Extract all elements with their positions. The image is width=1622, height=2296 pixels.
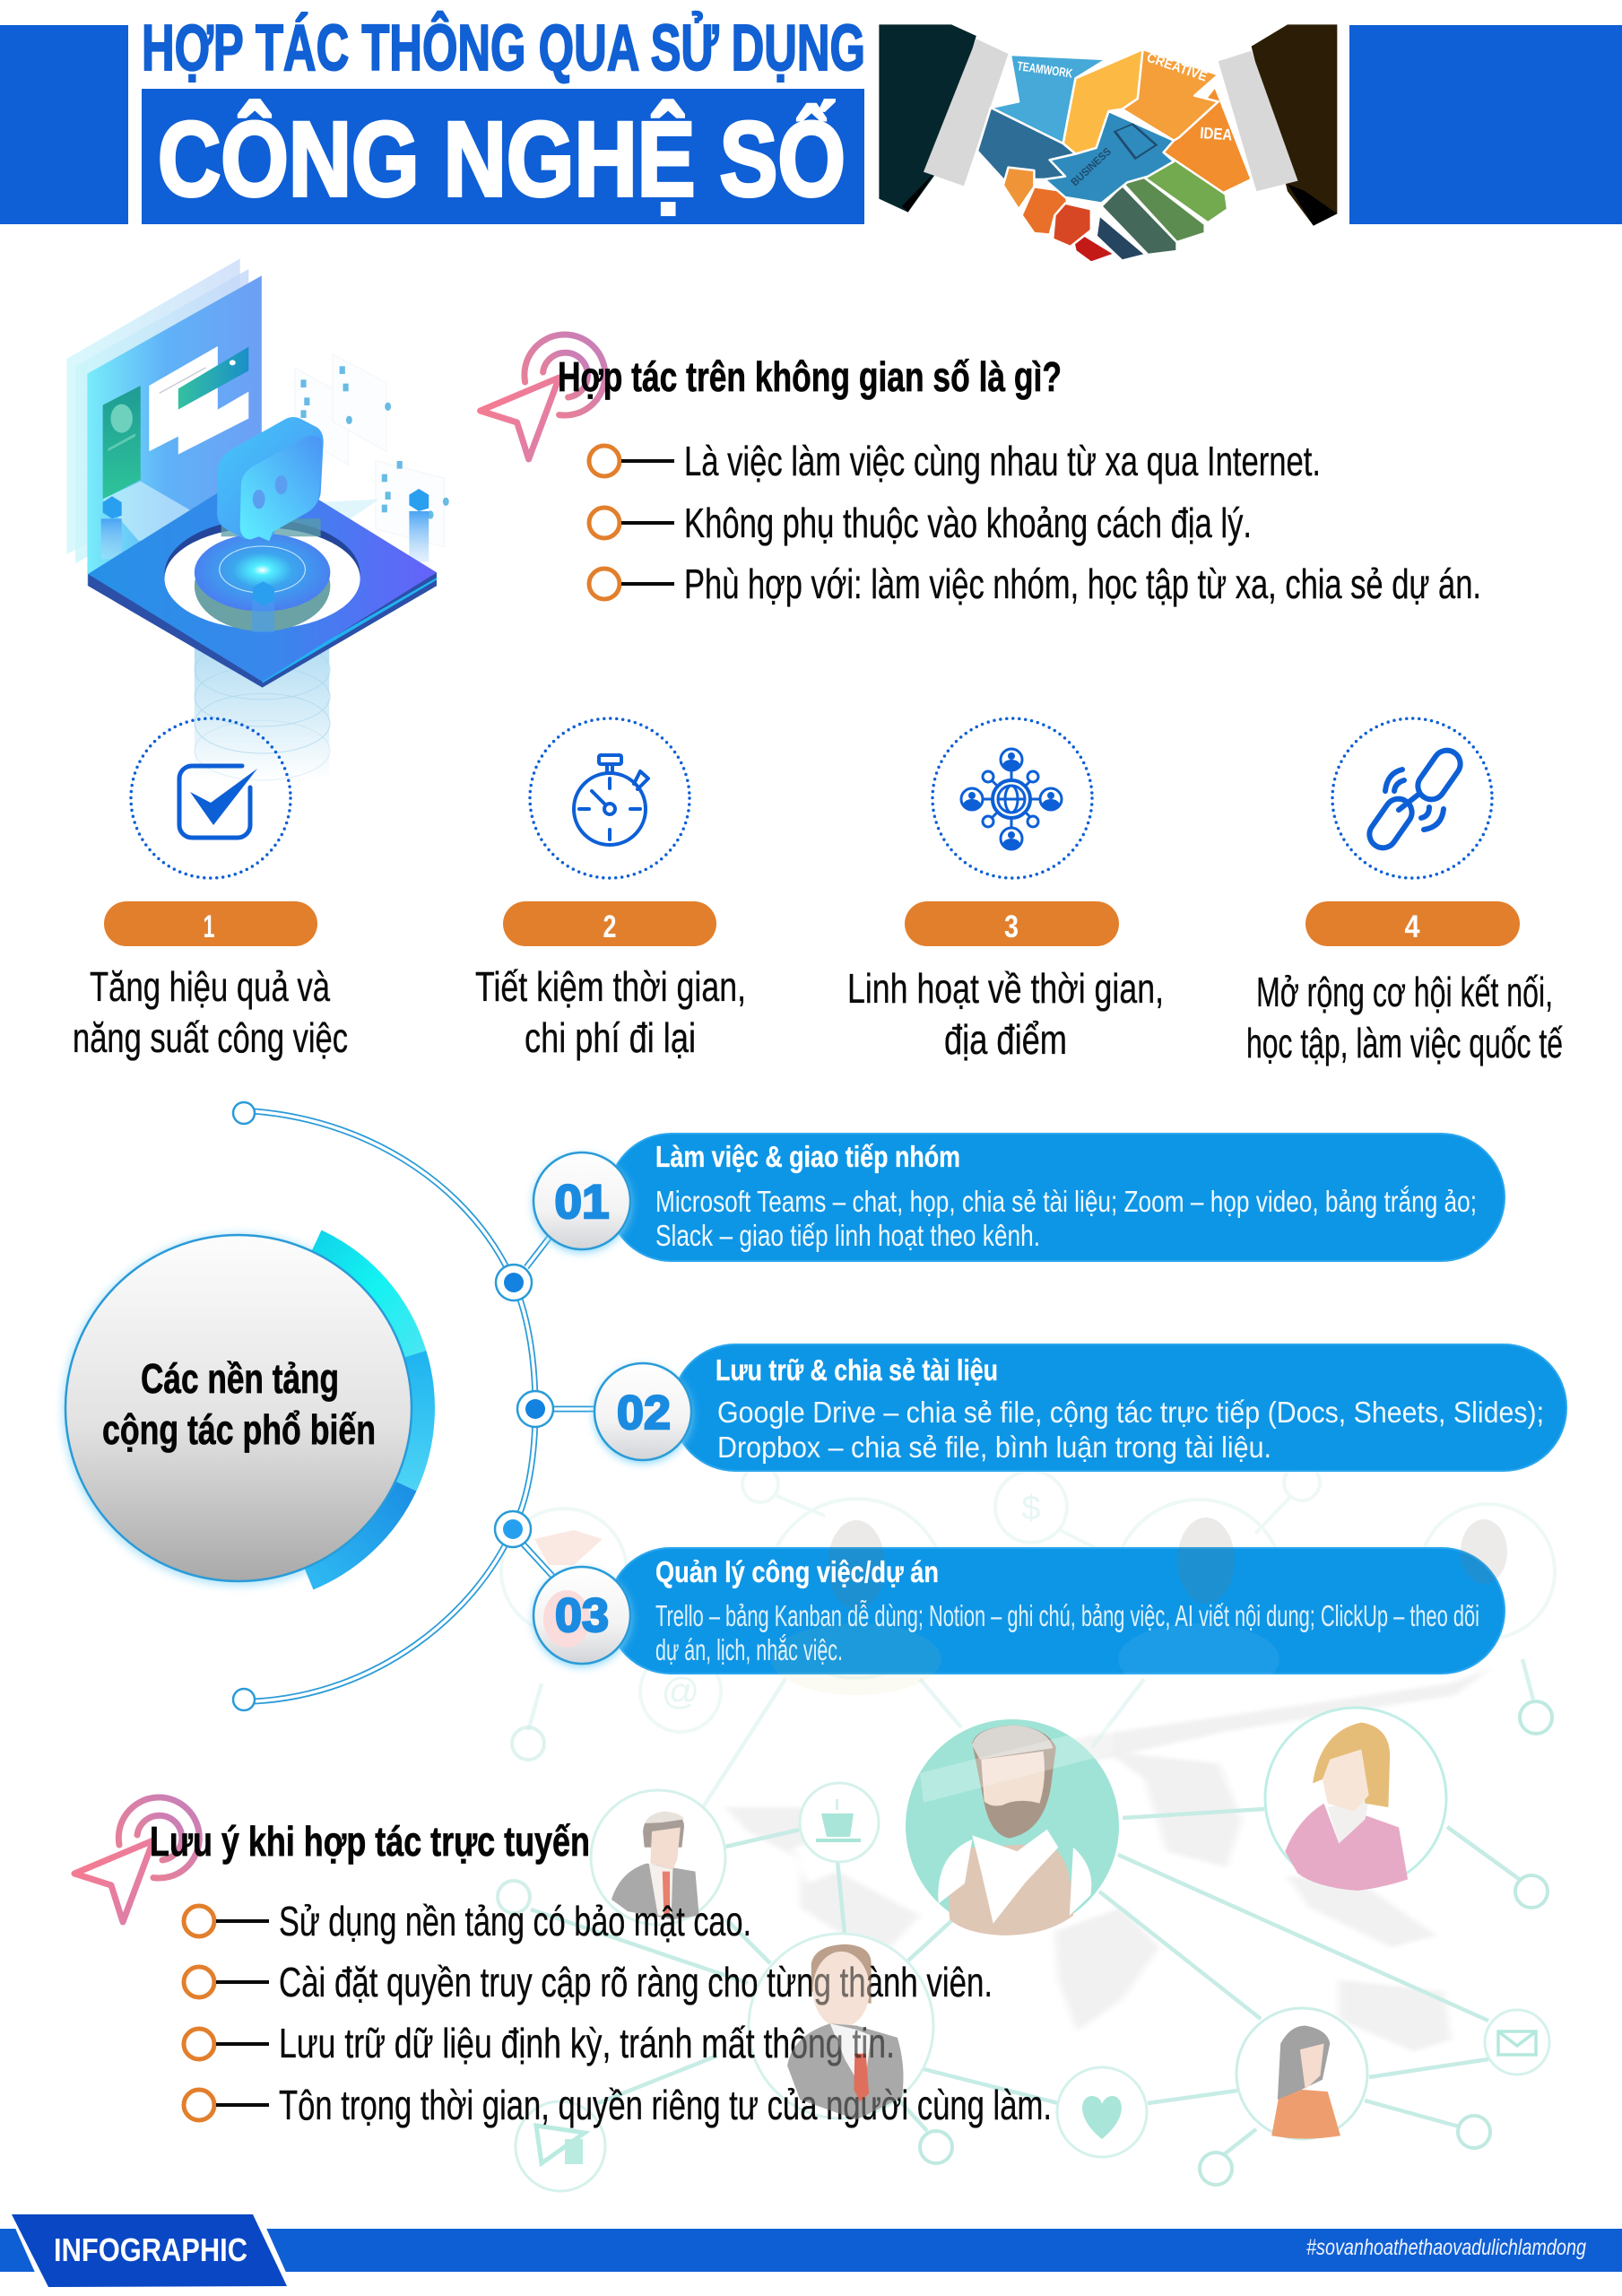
person: woman in pink xyxy=(1265,1708,1446,1891)
handshake puzzle illustration xyxy=(879,24,1337,263)
benefit 2: chi phí đi lại xyxy=(525,1014,696,1061)
label: idea: IDEA xyxy=(1200,124,1233,144)
bullet list xyxy=(589,438,1481,607)
outer arc xyxy=(233,1102,535,1710)
central circle with coloured arcs: cộng tác phổ biến xyxy=(102,1406,376,1453)
section: benefits xyxy=(73,718,1563,1066)
benefit 1: Tăng hiệu quả và xyxy=(90,963,330,1010)
item 01 xyxy=(533,1134,1505,1261)
benefit 2: Tiết kiệm thời gian, xyxy=(475,963,746,1010)
central circle with coloured arcs: Các nền tảng xyxy=(141,1355,339,1402)
connecting lines xyxy=(528,1659,1533,2155)
central circle with coloured arcs xyxy=(63,1234,422,1586)
benefit 4: 4 xyxy=(1404,909,1420,944)
footer tab xyxy=(12,2214,287,2287)
label: business: BUSINESS xyxy=(1068,145,1114,188)
section: what is digital collaboration xyxy=(481,335,1481,607)
footer tab outline xyxy=(6,2208,295,2292)
person: woman in orange xyxy=(1236,2008,1367,2139)
benefit 1: 1 xyxy=(203,909,215,944)
benefit 3: 3 xyxy=(1004,909,1019,944)
badge xyxy=(533,1570,630,1666)
isometric chat platform illustration xyxy=(66,258,449,780)
item 02: Dropbox – chia sẻ file, bình luận trong tài liệu. xyxy=(717,1431,1271,1464)
ghost figures showing through xyxy=(771,1518,1507,1695)
text: Làm việc & giao tiếp nhóm xyxy=(655,1140,960,1173)
benefit 3: địa điểm xyxy=(944,1016,1067,1063)
benefit 2: 2 xyxy=(603,909,617,944)
figure overlay tinting the text xyxy=(787,1944,903,2119)
title line 1: HỢP TÁC THÔNG QUA SỬ DỤNG xyxy=(142,12,865,84)
pill xyxy=(672,1344,1566,1471)
text: Quản lý công việc/dự án xyxy=(655,1555,939,1588)
base xyxy=(88,572,437,688)
item 01: 01 xyxy=(554,1176,610,1229)
timeline nodes xyxy=(495,1265,553,1547)
floor glow xyxy=(103,482,218,541)
icon: coffee cup xyxy=(800,1783,879,1862)
title box xyxy=(142,89,864,224)
upper faint circles xyxy=(501,1465,1555,1732)
label: creative: CREATIVE xyxy=(1145,50,1209,85)
item 03: dự án, lịch, nhắc việc. xyxy=(655,1633,843,1666)
badge xyxy=(594,1366,691,1463)
icon: paper plane target xyxy=(481,335,605,459)
item 03: 03 xyxy=(555,1589,609,1642)
benefit 3: Linh hoạt về thời gian, xyxy=(847,965,1164,1012)
bullet list xyxy=(184,1898,1052,2128)
item 01: Slack – giao tiếp linh hoạt theo kênh. xyxy=(655,1219,1040,1252)
footer xyxy=(0,2208,1622,2292)
text: Lưu trữ & chia sẻ tài liệu xyxy=(716,1353,998,1387)
bullet list: Lưu trữ dữ liệu định kỳ, tránh mất thông tin. xyxy=(279,2020,895,2066)
chat bubble xyxy=(217,417,324,541)
title line 2: CÔNG NGHỆ SỐ xyxy=(158,100,846,219)
icon: paper plane target xyxy=(74,1797,199,1922)
benefit 4 xyxy=(1246,718,1563,1066)
bullet list: Tôn trọng thời gian, quyền riêng tư của người cùng làm. xyxy=(279,2082,1052,2128)
icon: checkbox xyxy=(179,766,257,838)
bullet list: Không phụ thuộc vào khoảng cách địa lý. xyxy=(684,500,1252,546)
small ring nodes xyxy=(498,1701,1552,2185)
front pillar xyxy=(252,599,274,632)
person: man in suit, centre xyxy=(749,1934,933,2119)
section: online collaboration notes xyxy=(74,1797,1052,2128)
connectors xyxy=(522,1236,597,1576)
background network illustration xyxy=(498,1465,1555,2191)
icon: stopwatch xyxy=(574,755,648,845)
pill xyxy=(608,1134,1505,1261)
bullet list: Sử dụng nền tảng có bảo mật cao. xyxy=(279,1898,751,1944)
icon: heart xyxy=(1057,2067,1147,2157)
benefit 3 xyxy=(847,718,1164,1063)
icon: at sign: @ xyxy=(662,1670,699,1712)
item 02 xyxy=(594,1344,1566,1471)
pill xyxy=(608,1548,1505,1674)
benefit 2 xyxy=(475,718,746,1061)
bullet list: Là việc làm việc cùng nhau từ xa qua Internet. xyxy=(684,438,1321,484)
header xyxy=(0,12,1622,263)
icon: chain link xyxy=(1365,745,1465,853)
side document cards xyxy=(295,354,444,547)
section: collaboration platforms xyxy=(63,1102,1566,1710)
person: man in grey suit, left xyxy=(591,1790,725,1925)
heading: Hợp tác trên không gian số là gì? xyxy=(558,353,1062,400)
label: INFOGRAPHIC xyxy=(54,2231,247,2268)
footer band xyxy=(0,2229,1622,2272)
towers xyxy=(101,518,122,559)
item 03 xyxy=(533,1518,1507,1695)
benefit 1 xyxy=(73,718,348,1061)
bullet list: Cài đặt quyền truy cập rõ ràng cho từng thành viên. xyxy=(279,1959,993,2005)
heading: Lưu ý khi hợp tác trực tuyến xyxy=(150,1818,590,1865)
right blue band xyxy=(1349,25,1622,224)
icon: megaphone xyxy=(516,2101,605,2191)
benefit 1: năng suất công việc xyxy=(73,1014,348,1061)
icon: mail xyxy=(1485,2010,1549,2074)
item 02: 02 xyxy=(617,1387,671,1439)
icon: global network xyxy=(961,749,1062,849)
badge xyxy=(533,1155,630,1252)
person: main man in teal circle xyxy=(906,1719,1119,1935)
left blue band xyxy=(0,25,128,224)
label: teamwork: TEAMWORK xyxy=(1017,58,1073,81)
world map silhouette xyxy=(725,1667,1492,2051)
icon: dollar: $ xyxy=(1021,1490,1041,1527)
item 02: Google Drive – chia sẻ file, cộng tác trực tiếp (Docs, Sheets, Slides); xyxy=(717,1396,1544,1429)
